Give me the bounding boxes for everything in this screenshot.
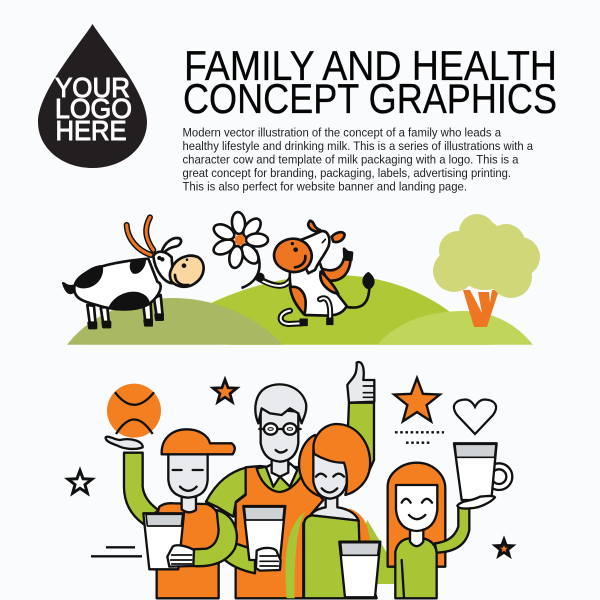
man cup (243, 506, 285, 560)
boy hand (106, 437, 143, 449)
cow body (74, 259, 161, 309)
boy face (173, 470, 203, 491)
muzzle (274, 239, 312, 272)
man raised arm and thumbs up (347, 362, 374, 475)
boy head (168, 454, 208, 498)
face details (316, 474, 344, 492)
description text: great concept for branding, packaging, labels, advertising printing. (182, 166, 511, 180)
big orange star (394, 378, 440, 421)
cow spots (75, 259, 150, 310)
description text (182, 126, 533, 194)
man smile (276, 450, 287, 452)
man back arm (206, 467, 247, 517)
logo text: YOUR (55, 72, 130, 103)
boy wrapped arm (193, 510, 237, 566)
logo text: HERE (56, 115, 126, 146)
neck (311, 497, 359, 521)
cow tail (63, 283, 75, 293)
orange spots (290, 272, 338, 314)
man hand (256, 548, 281, 571)
man torso vest (236, 466, 323, 598)
girl arm (435, 507, 469, 553)
woman (286, 424, 395, 598)
ears (308, 221, 345, 242)
flower with stem (211, 211, 268, 288)
dotted lines (395, 432, 444, 443)
tree (433, 214, 540, 327)
green hills (67, 275, 533, 345)
head (293, 231, 329, 273)
left arm (257, 274, 292, 286)
boy hand on cup (167, 545, 194, 567)
description text: healthy lifestyle and drinking milk. This is a series of illustrations with a (182, 139, 533, 153)
cow standing (63, 217, 204, 328)
girl face details (402, 499, 432, 519)
green sleeve (360, 520, 395, 584)
girl neck (410, 528, 423, 546)
man collar (266, 463, 297, 487)
man shirt (257, 467, 306, 492)
cow muzzle (170, 256, 204, 287)
tail (345, 273, 373, 308)
description text: character cow and template of milk packaging with a logo. This is a (182, 152, 519, 166)
cow legs (87, 295, 163, 328)
mug (454, 443, 512, 500)
face (313, 450, 347, 499)
small star centre (500, 545, 508, 552)
man hair (255, 384, 306, 423)
shoulder (348, 508, 370, 542)
boy cap (162, 429, 235, 454)
title (183, 42, 557, 122)
raised arm (347, 403, 374, 475)
boy cup (143, 513, 184, 569)
girl face (396, 485, 437, 531)
girl hand (457, 496, 495, 509)
small dark star (493, 537, 515, 558)
logo drop (38, 24, 147, 168)
body (290, 263, 347, 316)
man glasses (259, 423, 301, 435)
cow face details (158, 257, 188, 285)
small orange star (213, 380, 237, 402)
boy (106, 429, 237, 598)
small white star (68, 470, 92, 493)
boy raised arm (124, 453, 158, 524)
petals (211, 211, 268, 269)
body (304, 515, 377, 598)
thumb hand (347, 362, 374, 403)
front hair (313, 424, 370, 495)
man (206, 384, 323, 598)
cow sitting (257, 221, 373, 326)
description text: Modern vector illustration of the concept of a family who leads a (182, 126, 501, 140)
man neck (272, 458, 288, 477)
boy torso (157, 503, 219, 598)
green stripe (286, 512, 305, 598)
girl (388, 443, 512, 598)
girl hair (388, 463, 445, 567)
logo text: LOGO (55, 93, 132, 124)
cow ear (162, 238, 181, 253)
boy neck (182, 497, 196, 512)
description text: This is also perfect for website banner and landing page. (182, 180, 467, 194)
girl sleeve line (402, 560, 404, 597)
cow head (153, 252, 173, 283)
cup (339, 542, 380, 597)
logo text (55, 72, 132, 146)
right arm (322, 249, 352, 281)
girl body (395, 538, 437, 598)
stem (242, 250, 260, 288)
cow horns (127, 217, 153, 255)
legs (281, 298, 333, 326)
face details (291, 239, 325, 267)
flower centre (235, 235, 245, 245)
title: FAMILY AND HEALTH (184, 42, 557, 89)
basketball (107, 384, 161, 438)
motion lines (91, 547, 142, 556)
man head (261, 408, 298, 462)
back hair (299, 435, 323, 497)
heart (454, 400, 496, 434)
man lower arm (222, 542, 255, 573)
